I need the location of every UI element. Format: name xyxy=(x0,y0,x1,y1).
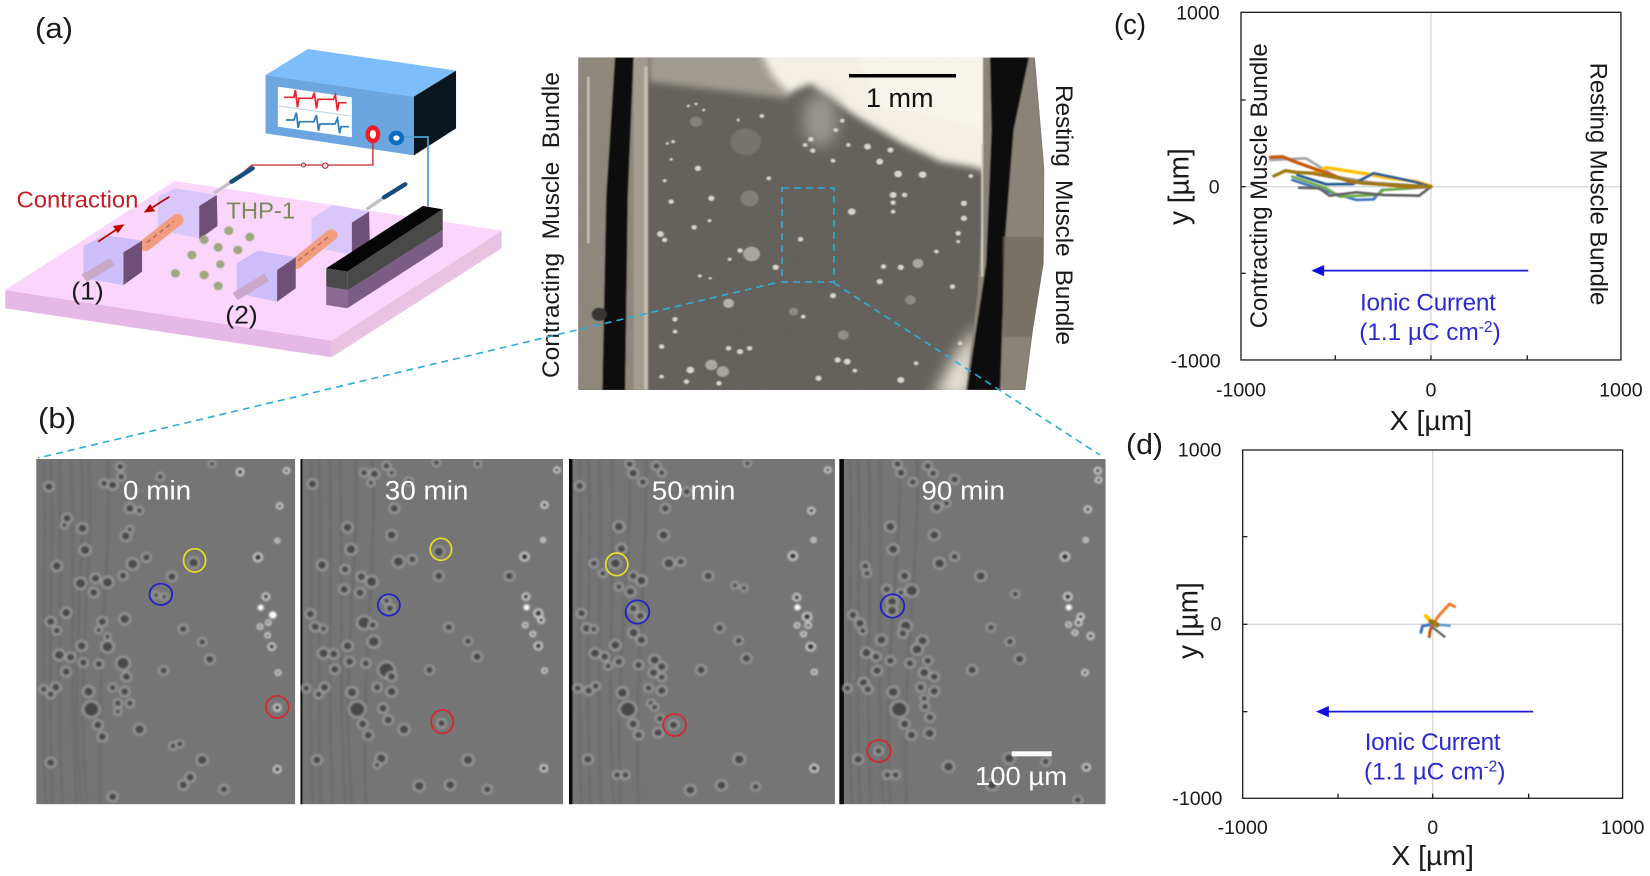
y tick labels: 0 xyxy=(1209,176,1220,198)
label: (2): (2) xyxy=(225,300,258,329)
micrograph 50 min xyxy=(569,459,835,804)
arrows: contraction xyxy=(98,197,169,242)
x tick labels xyxy=(1216,380,1643,402)
grid lines xyxy=(1241,12,1621,360)
y tick labels xyxy=(1171,2,1221,372)
x axis title: X [µm] xyxy=(1390,404,1472,436)
panel: muscle bundle photograph xyxy=(538,50,1077,397)
label: charge density: (1.1 µC cm xyxy=(1359,319,1479,346)
tracked cell markers xyxy=(150,549,289,718)
label: 50 min: 50 min xyxy=(652,476,735,505)
label: Resting Muscle Bundle: Resting Muscle Bundle xyxy=(1584,63,1612,305)
label: charge density: -2 xyxy=(1479,319,1493,336)
tracked cell markers xyxy=(378,538,453,733)
chart c: cell trajectories with muscle contraction xyxy=(1162,2,1643,436)
scale bar 1 mm xyxy=(849,74,956,78)
y tick labels: -1000 xyxy=(1172,788,1223,810)
label: Contracting Muscle Bundle: Contracting Muscle Bundle xyxy=(1246,43,1273,328)
label: (1): (1) xyxy=(71,276,104,305)
left muscle strip xyxy=(578,57,648,390)
panel label (d): (d) xyxy=(1126,429,1163,461)
x tick labels: 1000 xyxy=(1599,380,1643,402)
tracked cell markers xyxy=(867,594,904,762)
label: charge density: ) xyxy=(1493,319,1501,346)
label: charge density: (1.1 µC cm xyxy=(1364,758,1483,785)
label: Resting Muscle Bundle: Resting Muscle Bundle xyxy=(1050,85,1077,345)
x tick labels: 1000 xyxy=(1601,817,1645,839)
axis ticks xyxy=(1243,537,1529,798)
y axis title: y [µm] xyxy=(1162,148,1195,225)
label: Contraction: Contraction xyxy=(16,187,138,212)
arrow: ionic current xyxy=(1311,265,1528,276)
label: Ionic Current: Ionic Current xyxy=(1365,729,1501,756)
panels b: time-lapse micrographs xyxy=(36,459,563,804)
y tick labels: 0 xyxy=(1210,614,1222,636)
label: 0 min: 0 min xyxy=(123,475,191,505)
label: 30 min: 30 min xyxy=(385,475,468,505)
bright tissue regions xyxy=(648,50,995,397)
y tick labels: -1000 xyxy=(1171,350,1221,372)
icon: electrode bar xyxy=(326,206,443,308)
micrograph 90 min xyxy=(839,459,1106,804)
tracked cell markers xyxy=(606,553,686,736)
label: 1 mm: 1 mm xyxy=(866,83,934,113)
icon: muscle bundle 1 xyxy=(83,188,217,285)
micrograph 30 min xyxy=(300,459,563,804)
y axis title: y [µm] xyxy=(1172,582,1204,659)
icon: blue terminal and wire xyxy=(389,131,428,207)
label: THP-1: THP-1 xyxy=(226,198,295,224)
x axis title: X [µm] xyxy=(1391,839,1474,871)
y tick labels: 1000 xyxy=(1176,2,1220,24)
panel label (c): (c) xyxy=(1114,9,1146,41)
icon: stimulator box xyxy=(266,49,456,155)
label: charge density: -2 xyxy=(1483,758,1497,775)
trajectories xyxy=(1270,157,1431,200)
trajectories xyxy=(1421,604,1455,637)
platform base xyxy=(5,181,502,357)
panel a: device schematic xyxy=(5,49,502,357)
icon: red terminal and wire xyxy=(232,125,380,183)
label: charge density: ) xyxy=(1497,758,1505,785)
axes frame xyxy=(1241,12,1621,360)
icon: muscle bundle 2 xyxy=(235,205,370,302)
label: Contracting Muscle Bundle: Contracting Muscle Bundle xyxy=(538,72,565,378)
icon: THP-1 cells xyxy=(171,226,254,290)
axes frame xyxy=(1243,450,1623,798)
photo image xyxy=(578,50,1044,397)
arrow: ionic current xyxy=(1316,706,1533,717)
right muscle strip xyxy=(966,57,1044,390)
x tick labels: 0 xyxy=(1426,380,1437,402)
x tick labels: -1000 xyxy=(1216,380,1266,402)
x tick labels: 0 xyxy=(1427,817,1438,839)
y tick labels xyxy=(1172,440,1223,810)
photo texture xyxy=(578,57,1044,390)
x tick labels xyxy=(1218,817,1645,839)
panel label (b): (b) xyxy=(38,403,76,435)
grid lines xyxy=(1243,450,1623,798)
chart d: cell trajectories without muscle contraction xyxy=(1172,440,1645,871)
label: 90 min: 90 min xyxy=(921,476,1005,505)
x tick labels: -1000 xyxy=(1218,817,1268,839)
label: Ionic Current: Ionic Current xyxy=(1360,290,1496,317)
panel label (a): (a) xyxy=(35,13,73,45)
zoom region and connecting dashed lines xyxy=(38,188,1100,458)
icon: electrode needles xyxy=(214,168,405,209)
micrograph 0 min xyxy=(36,459,295,804)
axis ticks xyxy=(1241,100,1527,360)
scale bar 100 µm xyxy=(1012,751,1052,756)
cell dots xyxy=(657,103,973,386)
y tick labels: 1000 xyxy=(1178,440,1222,462)
label: 100 µm: 100 µm xyxy=(975,762,1067,791)
